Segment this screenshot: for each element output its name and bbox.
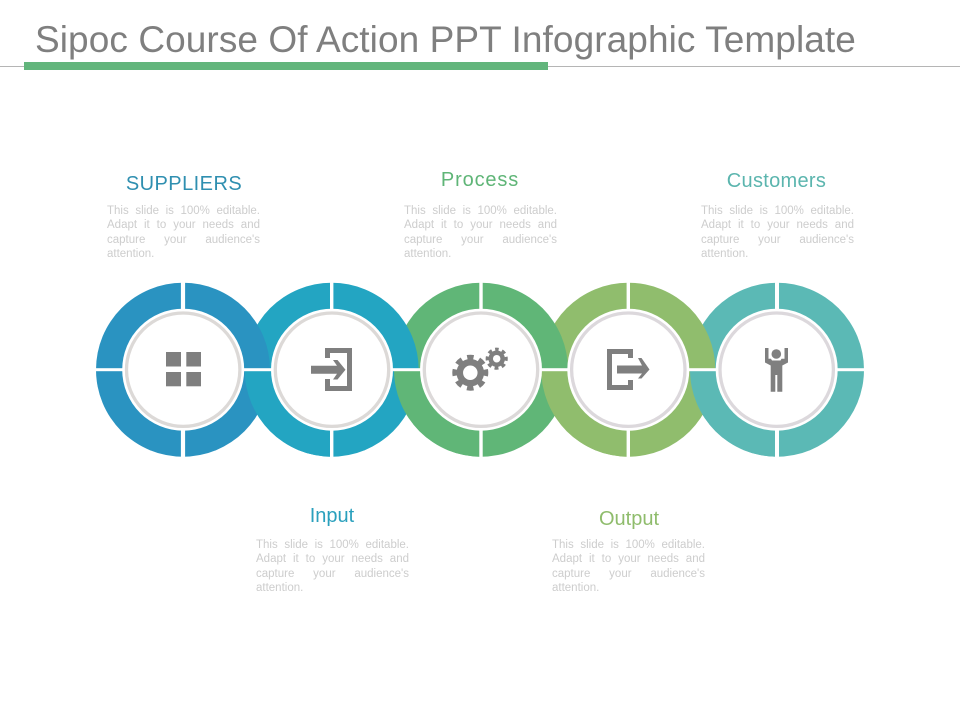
text block: process: This slide is 100% editable.: [404, 204, 557, 216]
icon: person with raised arms: [765, 348, 788, 392]
text block: input: attention.: [256, 582, 303, 594]
text block: output: This slide is 100% editable.: [552, 538, 705, 550]
text block: customers: capture your audience's: [701, 234, 854, 246]
icon: four squares: [166, 352, 201, 386]
heading: suppliers: SUPPLIERS: [126, 173, 242, 195]
text block: customers: attention.: [701, 248, 748, 260]
text block: customers: Adapt it to your needs and: [701, 219, 854, 231]
hub: suppliers: [122, 309, 244, 431]
text block: suppliers: capture your audience's: [107, 234, 260, 246]
hub: process: [420, 309, 542, 431]
ring: process: [394, 283, 568, 457]
hub: input: [271, 309, 393, 431]
icon: enter arrow: [311, 348, 352, 391]
ring: output: [541, 283, 715, 457]
text block: process: [404, 204, 557, 260]
heading: output: Output: [599, 508, 659, 530]
text block: suppliers: This slide is 100% editable.: [107, 204, 260, 216]
hub: output: [567, 309, 689, 431]
text block: output: attention.: [552, 582, 599, 594]
heading: process: Process: [441, 169, 519, 191]
icon: gears: [455, 349, 506, 388]
icon: exit arrow: [607, 349, 650, 390]
text block: process: attention.: [404, 248, 451, 260]
text block: input: Adapt it to your needs and: [256, 553, 409, 565]
heading: input: Input: [310, 505, 354, 527]
title underline rule: [0, 66, 960, 67]
text block: input: [256, 538, 409, 594]
ring overlaps: lower-left quadrants: [245, 370, 777, 457]
text block: input: This slide is 100% editable.: [256, 538, 409, 550]
hub: customers: [716, 309, 838, 431]
title accent bar: [24, 62, 548, 70]
text block: output: [552, 538, 705, 594]
heading: customers: Customers: [727, 170, 826, 192]
text block: output: Adapt it to your needs and: [552, 553, 705, 565]
title: Sipoc Course Of Action PPT Infographic Template: [35, 19, 856, 60]
ring: suppliers: [96, 283, 270, 457]
text block: process: capture your audience's: [404, 234, 557, 246]
text block: suppliers: [107, 204, 260, 260]
text block: process: Adapt it to your needs and: [404, 219, 557, 231]
text block: suppliers: attention.: [107, 248, 154, 260]
text block: suppliers: Adapt it to your needs and: [107, 219, 260, 231]
ring: customers: [690, 283, 864, 457]
text block: input: capture your audience's: [256, 568, 409, 580]
ring segment gaps: [90, 280, 870, 460]
text block: customers: [701, 204, 854, 260]
ring: input: [245, 283, 419, 457]
text block: output: capture your audience's: [552, 568, 705, 580]
text block: customers: This slide is 100% editable.: [701, 204, 854, 216]
